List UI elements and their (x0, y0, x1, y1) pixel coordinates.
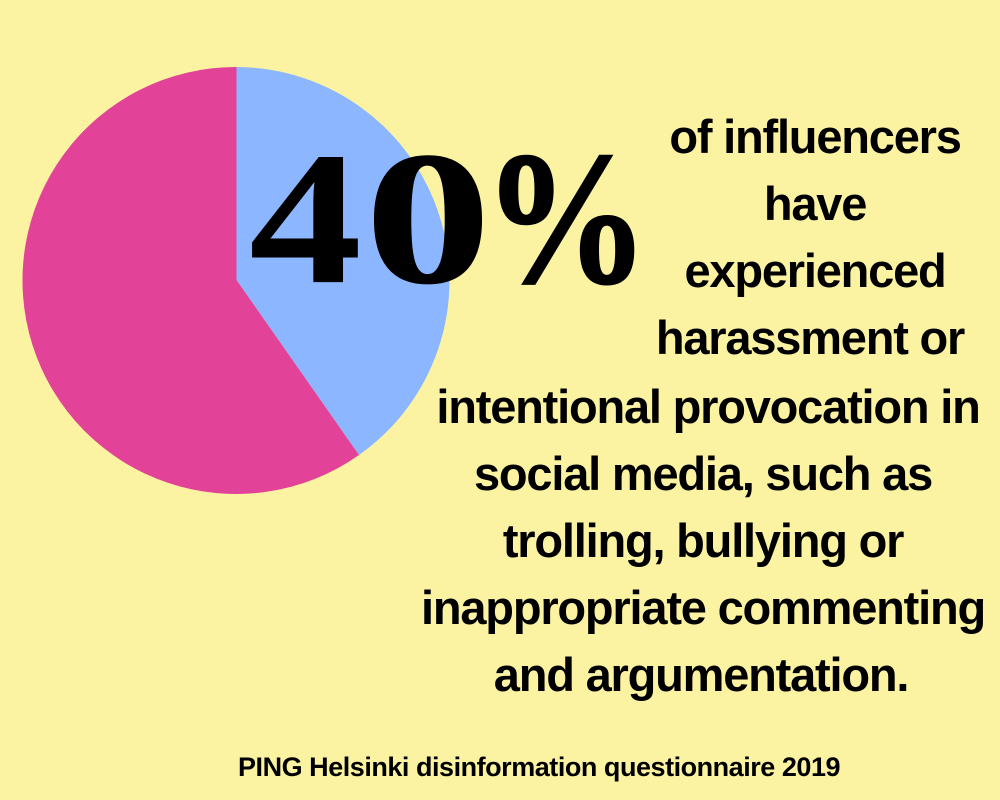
big percentage: % (483, 114, 649, 324)
big percentage: 4 (249, 114, 362, 324)
description text: trolling, bullying or (503, 514, 903, 567)
big percentage (249, 114, 649, 324)
description text: and argumentation. (494, 648, 908, 701)
description text (421, 110, 985, 701)
slice: 60% pink (22, 67, 359, 494)
description text: social media, such as (474, 447, 932, 500)
description text: intentional provocation in (436, 380, 980, 433)
description text: of influencers (669, 110, 961, 163)
description text: have (764, 177, 866, 230)
source footnote: PING Helsinki disinformation questionnaire 2019 (238, 752, 840, 782)
description text: inappropriate commenting (421, 581, 985, 634)
description text: experienced (684, 244, 946, 297)
slice: 40% blue (236, 67, 449, 455)
big percentage: 0 (365, 114, 491, 324)
description text: harassment or (656, 311, 964, 364)
